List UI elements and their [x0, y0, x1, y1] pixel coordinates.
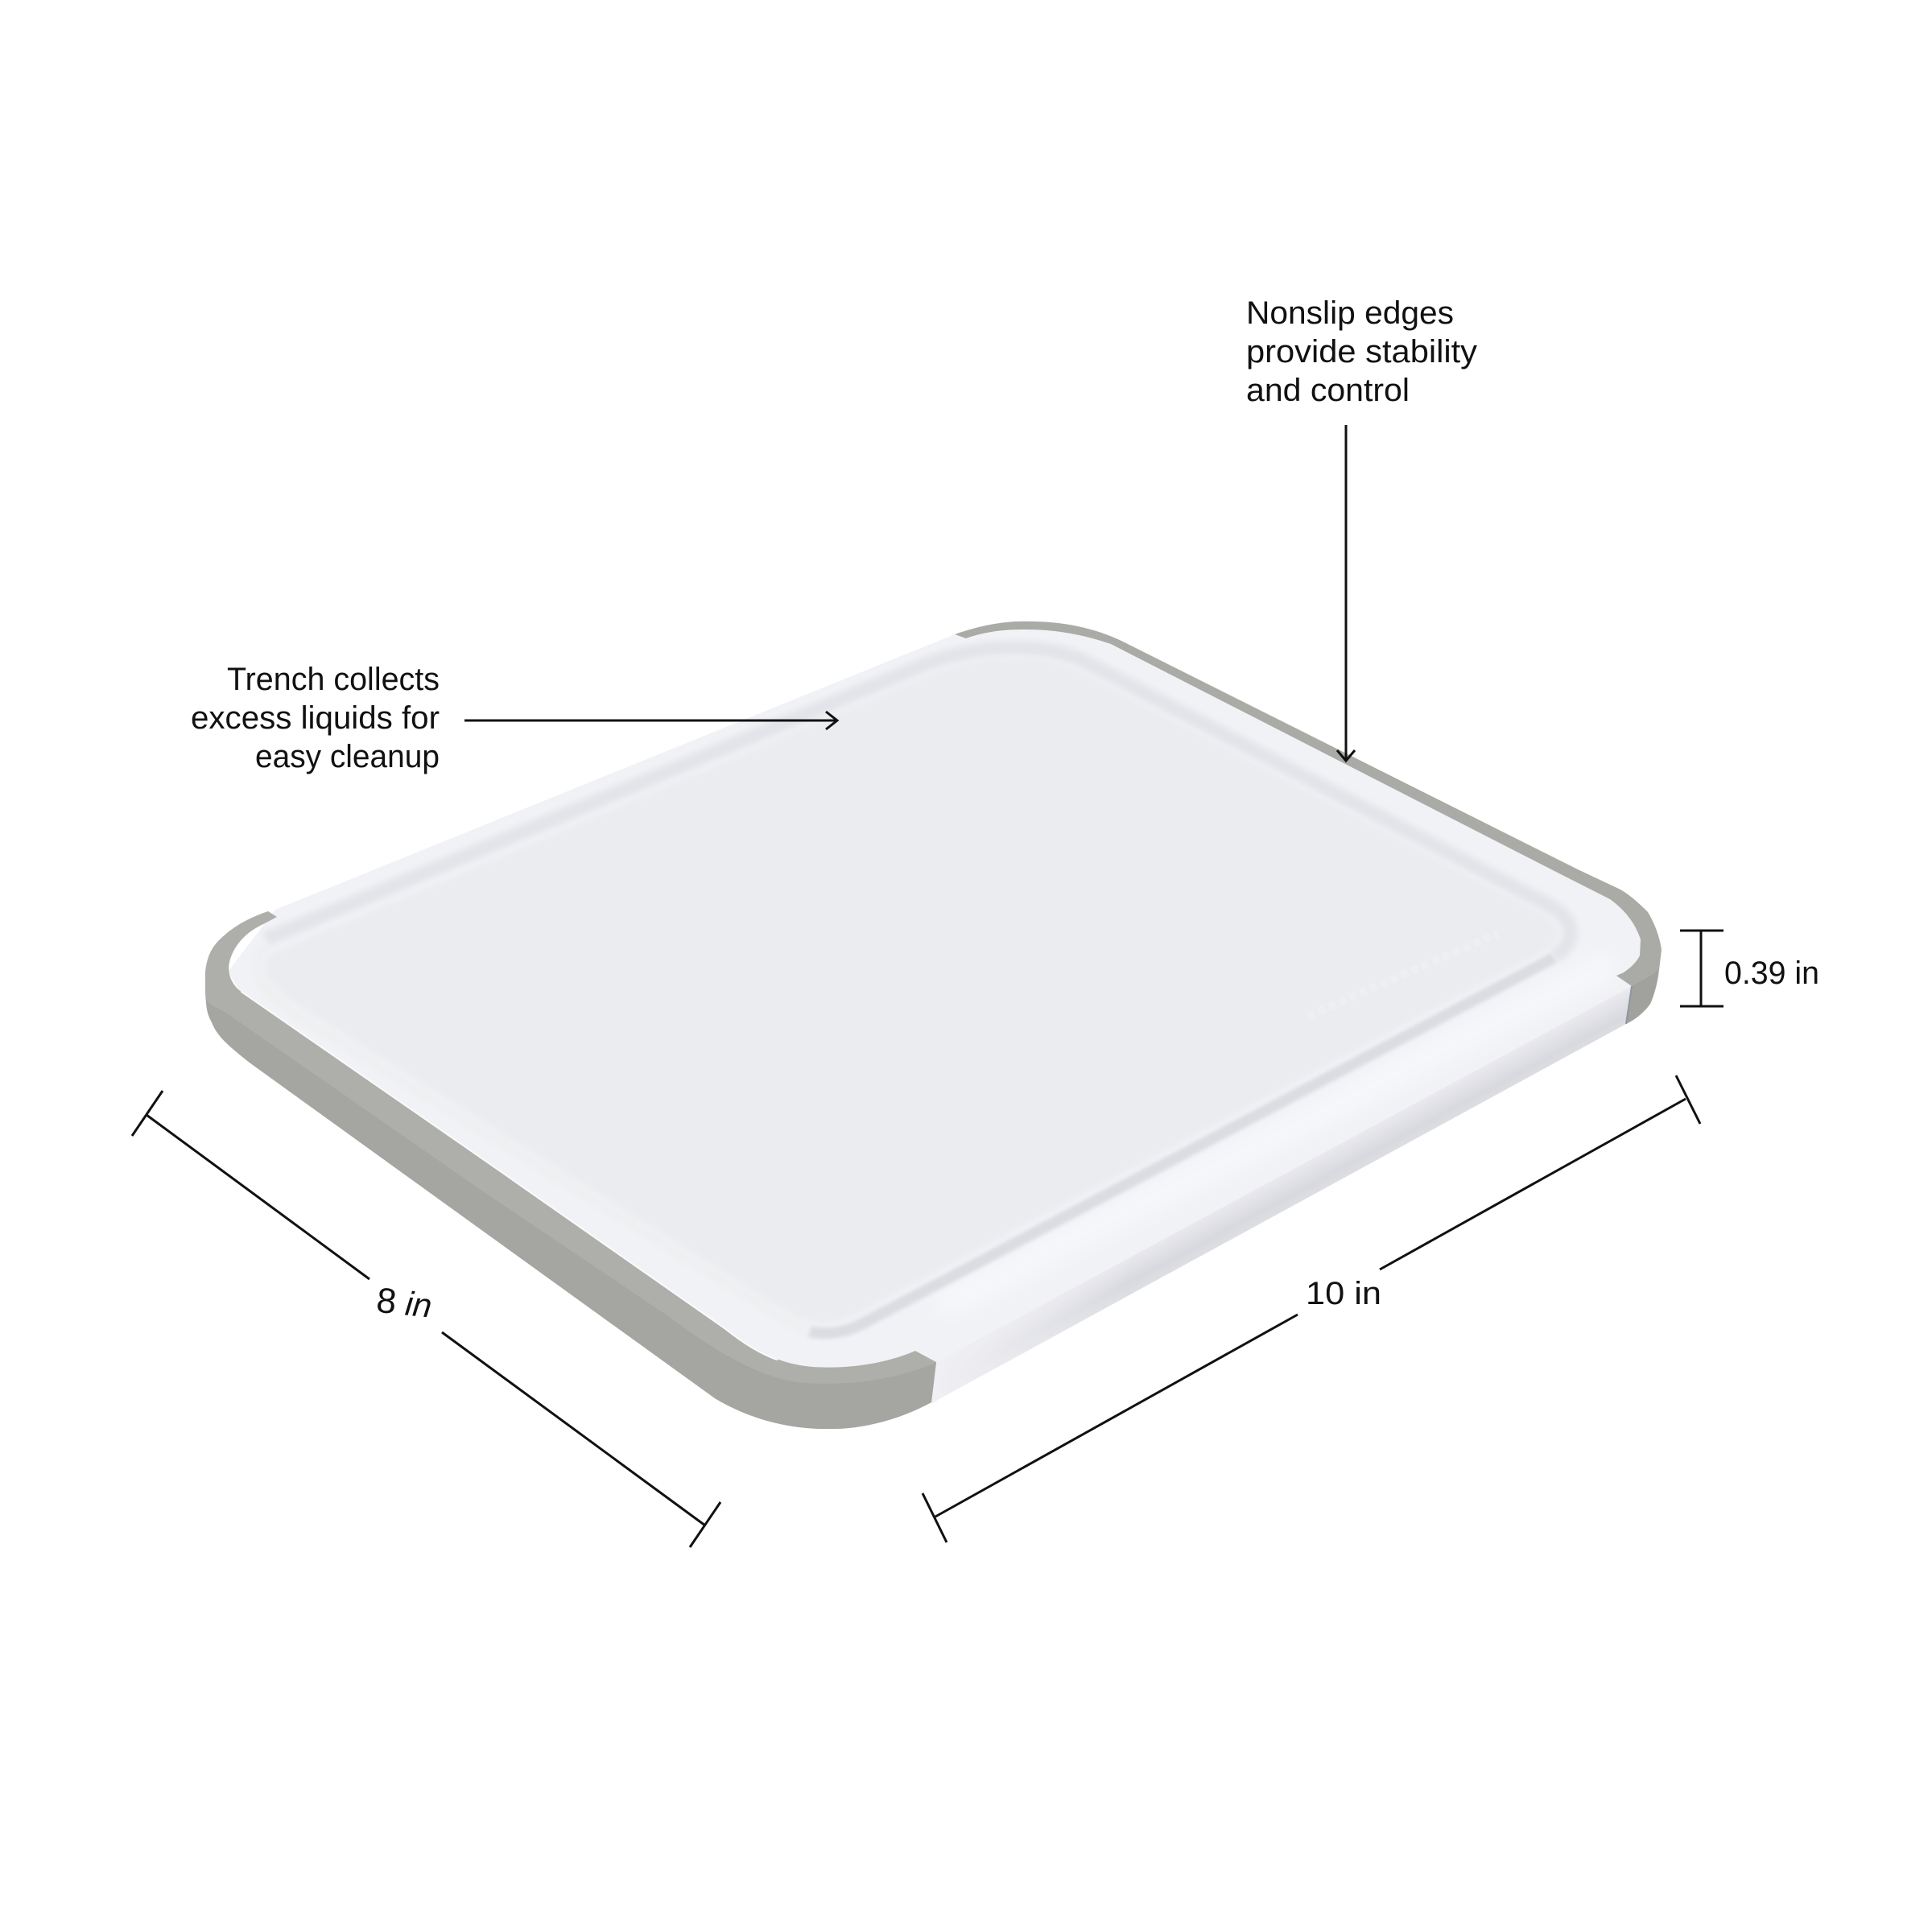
callout text: trench	[191, 662, 440, 774]
callout text: trench: Trench collects	[227, 662, 440, 697]
bracket: thickness	[1680, 931, 1724, 1006]
callout text: nonslip	[1246, 295, 1477, 408]
faint brand mark	[1308, 934, 1497, 1016]
label: 8 in: in	[403, 1284, 434, 1325]
grey rubber edge, left and front	[205, 911, 936, 1429]
board top surface	[228, 630, 1641, 1368]
grey rubber edge, back and right corner	[955, 621, 1662, 1024]
trench	[258, 648, 1602, 1333]
callout text: trench: excess liquids for	[191, 700, 440, 736]
trench channel front left	[258, 943, 809, 1330]
callout text: nonslip: provide stability	[1246, 334, 1477, 369]
grey side, front band	[206, 1000, 936, 1429]
label: 10 in: 10 in	[1306, 1276, 1381, 1311]
grey edge seam	[1626, 986, 1632, 1024]
callout text: nonslip: Nonslip edges	[1246, 295, 1454, 331]
label: 8 in: 8	[374, 1281, 398, 1322]
trench channel front right	[809, 958, 1554, 1333]
arrow: trench	[464, 712, 837, 729]
label: 0.39 in: 0.39 in	[1724, 956, 1819, 991]
dimension: width	[132, 1091, 720, 1547]
callout: trench	[191, 662, 837, 774]
trench channel back and right	[266, 648, 1571, 956]
dimension: thickness	[1680, 931, 1819, 1006]
cutting board	[205, 621, 1662, 1429]
dimension line: 8 in	[132, 1091, 720, 1547]
callout text: trench: easy cleanup	[255, 739, 440, 774]
board side face	[931, 986, 1632, 1404]
label: 8 in	[374, 1281, 434, 1326]
arrow: nonslip	[1337, 425, 1355, 761]
white highlight along grey edge	[242, 992, 777, 1360]
grey side, right corner	[1626, 970, 1658, 1024]
dimension line: 10 in	[923, 1075, 1700, 1542]
callout text: nonslip: and control	[1246, 373, 1410, 408]
dimension: length	[923, 1075, 1700, 1542]
cutting surface	[265, 658, 1559, 1323]
rim highlight, front right	[950, 968, 1602, 1302]
callout: nonslip edges	[1246, 295, 1477, 761]
